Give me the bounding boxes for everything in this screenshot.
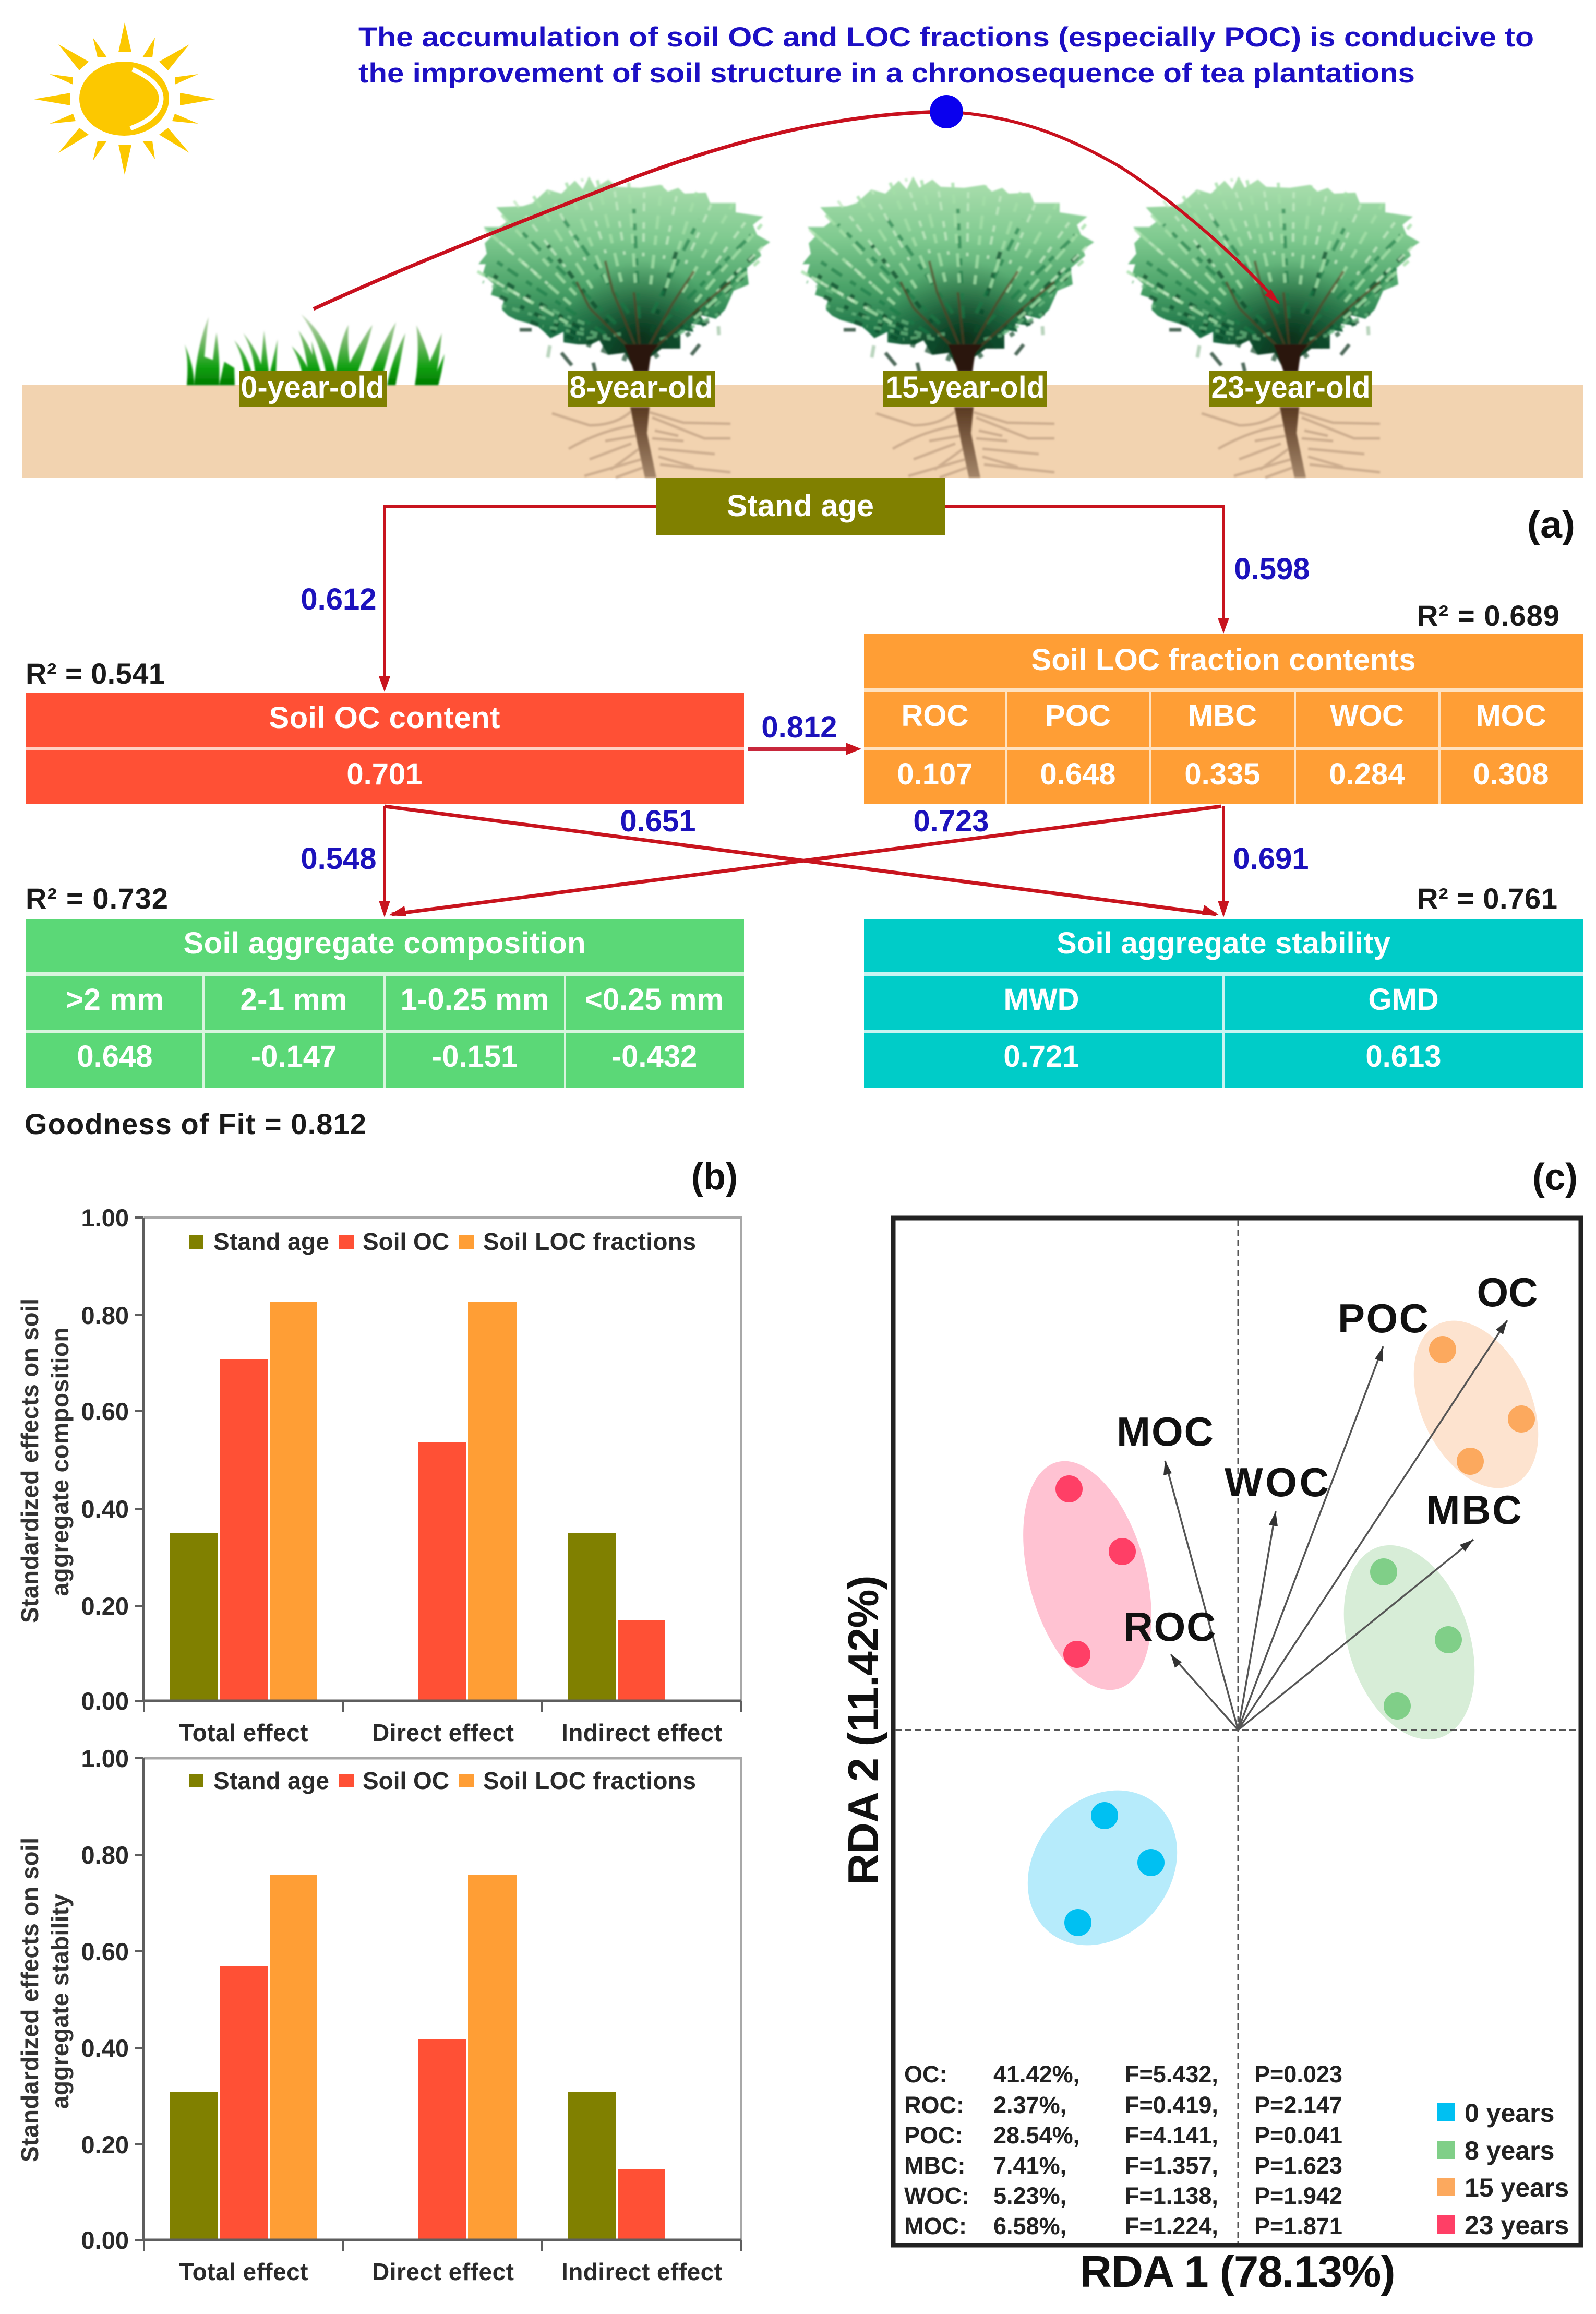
cluster: 23 years: [1001, 1447, 1174, 1704]
box: soil LOC fraction contents: Soil LOC fraction contents: [1031, 643, 1416, 677]
R squared 0.689: R² = 0.689: [1417, 599, 1559, 632]
bar chart: aggregate composition: 0.80: [81, 1302, 129, 1329]
vector labels: [1117, 1269, 1538, 1650]
statistics table: P=2.147: [1254, 2092, 1342, 2118]
statistics table: P=0.041: [1254, 2122, 1342, 2149]
axis guide lines: [895, 1220, 1579, 2243]
box: soil OC content: Soil OC content: [269, 701, 500, 735]
path coefficient 0.651: 0.651: [620, 804, 696, 838]
title: The accumulation of soil OC and LOC fractions (especially POC) is conducive to: [358, 22, 1534, 53]
box: soil LOC fraction contents: MBC: [1188, 699, 1257, 733]
bar chart: aggregate composition: Standardized effects on soil: [16, 1298, 43, 1623]
goodness of fit: Goodness of Fit = 0.812: [25, 1107, 366, 1140]
box: stand age: Stand age: [727, 489, 874, 523]
icon: grass, 0-year-old: [185, 314, 445, 385]
path coefficient 0.548: 0.548: [301, 842, 377, 876]
statistics table: P=1.942: [1254, 2182, 1342, 2209]
vector labels: MBC: [1426, 1487, 1521, 1533]
statistics table: 2.37%,: [993, 2092, 1066, 2118]
bar chart: aggregate stability: Direct effect: [372, 2258, 514, 2285]
bar chart: aggregate stability: Soil LOC fractions: [483, 1767, 696, 1794]
box: soil LOC fraction contents: 0.335: [1184, 757, 1261, 791]
statistics table: F=1.357,: [1125, 2152, 1218, 2179]
vector labels: ROC: [1124, 1604, 1216, 1650]
icon: tea tree, 8-year-old: [477, 176, 770, 478]
vector labels: MOC: [1117, 1409, 1214, 1454]
bar chart: aggregate composition: 0.20: [81, 1592, 129, 1620]
statistics table: P=1.623: [1254, 2152, 1342, 2179]
statistics table: F=5.432,: [1125, 2061, 1218, 2088]
statistics table: [904, 2061, 1342, 2239]
label: 8-year-old: 8-year-old: [570, 371, 713, 404]
plot frame: [893, 1218, 1581, 2245]
title: [358, 22, 1534, 89]
panel c: RDA ordination plot: [839, 1156, 1581, 2297]
box: soil aggregate stability: [864, 919, 1583, 1088]
box: soil LOC fraction contents: 0.308: [1473, 757, 1549, 791]
box: soil aggregate stability: 0.613: [1365, 1040, 1442, 1073]
path coefficient 0.723: 0.723: [913, 804, 989, 838]
box: soil LOC fraction contents: [864, 634, 1583, 804]
bar chart: aggregate stability: Total effect: [179, 2258, 308, 2285]
arrow: stand age to soil OC: [379, 506, 656, 692]
box: soil LOC fraction contents: 0.107: [897, 757, 973, 791]
box: soil aggregate composition: -0.151: [432, 1040, 518, 1073]
statistics table: 41.42%,: [993, 2061, 1079, 2088]
statistics table: WOC:: [904, 2182, 969, 2209]
label: 15-year-old: 15-year-old: [886, 371, 1045, 404]
bar chart: aggregate stability: [16, 1745, 741, 2285]
bar chart: aggregate stability: Standardized effects on soil: [16, 1838, 43, 2162]
box: soil OC content: 0.701: [346, 757, 423, 791]
box: soil aggregate stability: Soil aggregate stability: [1057, 926, 1390, 960]
box: soil LOC fraction contents: ROC: [902, 699, 968, 733]
box: soil aggregate composition: [26, 919, 744, 1088]
box: soil aggregate composition: <0.25 mm: [585, 983, 724, 1017]
statistics table: F=1.138,: [1125, 2182, 1218, 2209]
box: soil aggregate composition: Soil aggregate composition: [184, 926, 585, 960]
label: 0-year-old: 0-year-old: [241, 371, 384, 404]
label: 23-year-old: 23-year-old: [1211, 371, 1370, 404]
arrows: RDA vectors: [1163, 1320, 1507, 1730]
box: stand age: [656, 478, 945, 535]
box: soil LOC fraction contents: MOC: [1475, 699, 1546, 733]
bar chart: aggregate composition: Soil LOC fractions: [483, 1228, 696, 1255]
arrow: stand age to LOC fractions: [945, 506, 1229, 634]
cluster: 8 years: [1321, 1529, 1498, 1756]
statistics table: OC:: [904, 2061, 947, 2088]
R squared 0.541: R² = 0.541: [26, 657, 165, 690]
bar chart: aggregate stability: 0.20: [81, 2131, 129, 2158]
icon: blue dot: [930, 95, 963, 128]
legend: 23 years: [1465, 2211, 1569, 2240]
statistics table: 7.41%,: [993, 2152, 1066, 2179]
statistics table: MOC:: [904, 2213, 967, 2239]
box: soil aggregate stability: MWD: [1004, 983, 1079, 1017]
path coefficient 0.612: 0.612: [301, 582, 377, 616]
box: soil LOC fraction contents: 0.284: [1329, 757, 1405, 791]
cluster: 15 years: [1389, 1301, 1563, 1508]
vector labels: POC: [1338, 1295, 1429, 1341]
statistics table: P=1.871: [1254, 2213, 1342, 2239]
box: soil aggregate stability: GMD: [1368, 983, 1439, 1017]
bar chart: aggregate composition: Total effect: [179, 1719, 308, 1746]
statistics table: POC:: [904, 2122, 963, 2149]
bar chart: aggregate composition: 0.60: [81, 1398, 129, 1425]
icon: sun: [34, 22, 215, 175]
path coefficient 0.598: 0.598: [1234, 552, 1310, 586]
box: soil aggregate composition: 2-1 mm: [240, 983, 347, 1017]
bar chart: aggregate stability: 0.00: [81, 2226, 129, 2254]
bar chart: aggregate composition: Indirect effect: [561, 1719, 722, 1746]
bar chart: aggregate composition: 1.00: [81, 1204, 129, 1232]
box: soil aggregate composition: >2 mm: [66, 983, 164, 1017]
statistics table: 5.23%,: [993, 2182, 1066, 2209]
box: soil LOC fraction contents: 0.648: [1040, 757, 1116, 791]
vector labels: WOC: [1225, 1459, 1329, 1505]
panel label (c): (c): [1532, 1156, 1578, 1198]
path coefficient 0.812: 0.812: [761, 710, 837, 744]
legend: 8 years: [1465, 2136, 1554, 2165]
title: the improvement of soil structure in a chronosequence of tea plantations: [358, 58, 1415, 89]
bar chart: aggregate stability: 0.60: [81, 1938, 129, 1965]
statistics table: 28.54%,: [993, 2122, 1079, 2149]
arrows: soil OC and LOC fractions to aggregate composition and stability: [379, 806, 1229, 917]
bar chart: aggregate stability: Indirect effect: [561, 2258, 722, 2285]
box: soil LOC fraction contents: WOC: [1330, 699, 1404, 733]
bar chart: aggregate stability: Stand age: [213, 1767, 329, 1794]
statistics table: F=1.224,: [1125, 2213, 1218, 2239]
box: soil aggregate composition: -0.432: [611, 1040, 697, 1073]
cluster: 0 years: [997, 1760, 1208, 1975]
bar chart: aggregate stability: aggregate stability: [46, 1894, 74, 2109]
bar chart: aggregate composition: aggregate composition: [46, 1328, 74, 1596]
arrow: soil OC to LOC fractions: [748, 743, 861, 755]
vector labels: OC: [1477, 1269, 1538, 1315]
bar chart: aggregate stability: 1.00: [81, 1745, 129, 1772]
bar chart: aggregate stability: Soil OC: [363, 1767, 449, 1794]
icon: tea tree, 15-year-old: [801, 176, 1094, 478]
legend: 0 years: [1465, 2098, 1554, 2128]
box: soil aggregate stability: 0.721: [1003, 1040, 1079, 1073]
legend: 15 years: [1465, 2173, 1569, 2202]
statistics table: 6.58%,: [993, 2213, 1066, 2239]
bar chart: aggregate composition: 0.40: [81, 1495, 129, 1523]
box: soil aggregate composition: 1-0.25 mm: [401, 983, 549, 1017]
statistics table: P=0.023: [1254, 2061, 1342, 2088]
icon: tea tree, 23-year-old: [1127, 176, 1420, 478]
arrow: curve across the chronosequence: [314, 112, 1280, 309]
x axis label: RDA 1 (78.13%): [1080, 2247, 1395, 2297]
box: soil OC content: [26, 693, 744, 804]
bar chart: aggregate composition: Stand age: [213, 1228, 329, 1255]
bar chart: aggregate composition: Soil OC: [363, 1228, 449, 1255]
box: soil aggregate composition: 0.648: [77, 1040, 153, 1073]
bar chart: aggregate composition: [16, 1204, 741, 1746]
statistics table: F=4.141,: [1125, 2122, 1218, 2149]
statistics table: ROC:: [904, 2092, 964, 2118]
R squared 0.732: R² = 0.732: [26, 882, 168, 915]
box: soil LOC fraction contents: POC: [1045, 699, 1111, 733]
bar chart: aggregate composition: Direct effect: [372, 1719, 514, 1746]
panel b: standardized effects bar charts: [16, 1156, 741, 2285]
box: soil aggregate composition: -0.147: [251, 1040, 337, 1073]
y axis label: RDA 2 (11.42%): [839, 1575, 887, 1885]
bar chart: aggregate composition: 0.00: [81, 1687, 129, 1715]
bar chart: aggregate stability: 0.80: [81, 1841, 129, 1869]
statistics table: MBC:: [904, 2152, 965, 2179]
panel label (b): (b): [691, 1156, 738, 1198]
panel label (a): (a): [1527, 504, 1575, 546]
legend: [1437, 2098, 1569, 2240]
bar chart: aggregate stability: 0.40: [81, 2034, 129, 2062]
panel a: conceptual diagram and structural equation model: [22, 22, 1583, 1140]
statistics table: F=0.419,: [1125, 2092, 1218, 2118]
R squared 0.761: R² = 0.761: [1417, 882, 1557, 915]
soil band: [22, 385, 1583, 478]
path coefficient 0.691: 0.691: [1233, 842, 1309, 876]
